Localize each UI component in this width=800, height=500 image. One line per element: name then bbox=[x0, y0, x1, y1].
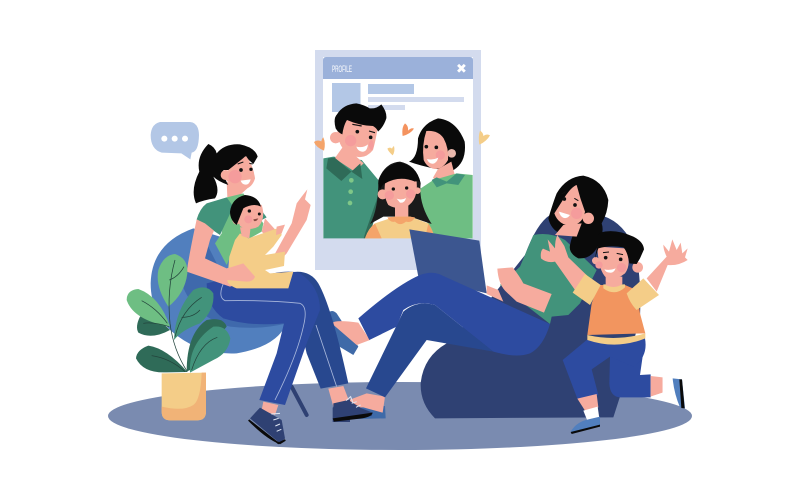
back leg bbox=[293, 272, 348, 389]
shoe front bbox=[250, 408, 285, 443]
father head bbox=[326, 103, 386, 181]
ponytail and hair bbox=[194, 144, 258, 203]
stems and veins bbox=[142, 260, 217, 372]
neck bbox=[606, 277, 622, 287]
hair bbox=[548, 176, 608, 258]
shirt sleeve bbox=[197, 197, 233, 235]
lower leg bbox=[366, 303, 493, 397]
leaf lower right bbox=[190, 326, 230, 373]
baby neck bbox=[240, 227, 251, 238]
laptop bbox=[409, 229, 487, 293]
profile frame bbox=[315, 50, 481, 270]
seated mother with laptop on beanbag bbox=[327, 215, 640, 419]
foot back bbox=[328, 386, 350, 407]
front mother shoe bbox=[333, 397, 373, 422]
baby body bbox=[227, 227, 293, 288]
holding arm bbox=[187, 219, 247, 287]
back sock bbox=[651, 377, 678, 403]
seated mother with baby lower body bbox=[151, 228, 350, 443]
hair bbox=[595, 231, 644, 264]
seated mother head bbox=[548, 176, 608, 258]
ear bbox=[221, 170, 231, 180]
running boy upper body bbox=[541, 231, 688, 310]
left arm bbox=[541, 235, 590, 290]
running boy lower body bbox=[563, 285, 685, 434]
shirt bbox=[500, 234, 597, 324]
right arm bbox=[647, 239, 688, 292]
pot shade bbox=[162, 373, 206, 420]
back shin bbox=[651, 376, 663, 397]
foot front bbox=[262, 402, 278, 415]
shirt body bbox=[215, 193, 263, 265]
leaf left bbox=[127, 289, 170, 327]
arm bbox=[497, 267, 552, 313]
foot back bbox=[332, 321, 370, 345]
hand on baby bbox=[227, 263, 255, 282]
profile text lines bbox=[368, 84, 464, 110]
hearts bbox=[314, 123, 490, 155]
father collar bbox=[326, 158, 351, 181]
baby hair bbox=[230, 195, 261, 225]
daughter bbox=[365, 162, 435, 238]
sock bbox=[583, 407, 599, 421]
avatar placeholder bbox=[332, 83, 360, 112]
back shoe bbox=[673, 378, 685, 408]
front leg bbox=[563, 338, 646, 399]
baby bbox=[227, 195, 293, 288]
front leg bbox=[207, 272, 320, 405]
shoe back bbox=[333, 399, 350, 422]
ears bbox=[632, 262, 643, 273]
upper leg bbox=[358, 273, 550, 355]
slipper back bbox=[327, 311, 358, 355]
pointing arm bbox=[273, 189, 311, 258]
neck bbox=[227, 182, 247, 197]
floor ellipse bbox=[108, 382, 692, 450]
shirt bbox=[587, 285, 645, 335]
pot bbox=[162, 373, 206, 420]
profile window bbox=[323, 57, 473, 238]
baby face bbox=[238, 203, 263, 229]
back leg bbox=[609, 340, 651, 397]
chair leg bbox=[292, 387, 307, 415]
face bbox=[554, 185, 585, 226]
plant bbox=[127, 254, 230, 420]
sleeves bbox=[573, 274, 601, 305]
baby hand bbox=[276, 225, 285, 235]
shoe bbox=[571, 417, 600, 433]
close icon: ✖ bbox=[456, 62, 467, 77]
leaf top bbox=[158, 254, 187, 307]
thigh skin bbox=[487, 285, 503, 302]
face bbox=[225, 156, 255, 189]
shin bbox=[577, 394, 598, 411]
window header bar bbox=[323, 57, 473, 79]
chair bbox=[151, 228, 287, 353]
slipper front bbox=[353, 406, 386, 419]
mother shirt in photo bbox=[365, 162, 473, 238]
collar bbox=[603, 284, 625, 292]
foot front bbox=[340, 393, 385, 413]
back leaves bbox=[137, 316, 170, 336]
seated mother with baby upper body bbox=[187, 144, 311, 288]
speech bubble bbox=[151, 122, 199, 159]
baby ear bbox=[232, 216, 241, 224]
shirt hem bbox=[587, 333, 645, 345]
father shirt bbox=[323, 157, 380, 238]
ear bbox=[583, 213, 594, 224]
leaf lower left bbox=[136, 346, 187, 372]
family photo bbox=[314, 123, 490, 238]
header title: PROFILE bbox=[332, 64, 352, 74]
leaf right bbox=[174, 287, 213, 340]
face bbox=[597, 247, 629, 279]
chair inner shadow bbox=[182, 243, 287, 328]
beanbag bbox=[421, 215, 640, 418]
mother in photo bbox=[409, 118, 465, 187]
neck bbox=[555, 223, 582, 237]
